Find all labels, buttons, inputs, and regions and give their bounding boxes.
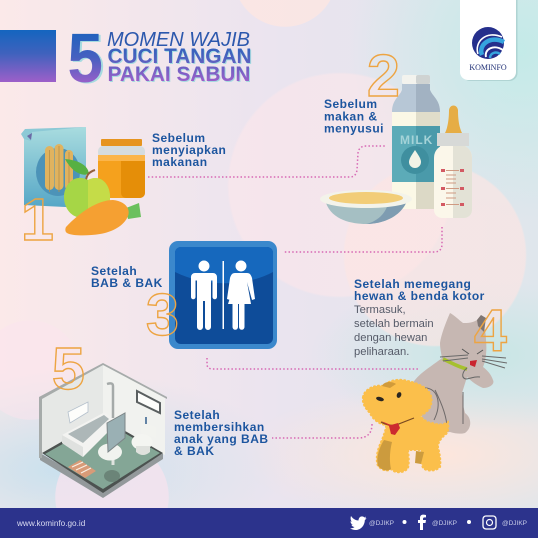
label 5: Setelah <box>174 408 220 422</box>
icon: twitter <box>350 516 366 530</box>
illustration 5: bathroom <box>39 363 167 498</box>
icon: sink mirror <box>107 413 125 452</box>
label 4: Termasuk, <box>354 304 406 316</box>
label 3: BAB & BAK <box>91 276 163 290</box>
icon: toilet <box>132 417 156 455</box>
divider <box>222 261 224 329</box>
icon: milk bottle: MILK <box>400 133 433 147</box>
icon: honey jar <box>98 139 145 198</box>
title: CUCI TANGAN <box>108 46 253 69</box>
icon: baby bottle <box>434 106 472 218</box>
illustration 1: food <box>21 127 145 235</box>
title: CUCI TANGAN <box>108 45 252 68</box>
logo card: KOMINFO <box>469 63 507 72</box>
label 1: Sebelum <box>152 131 206 145</box>
icon: carrot <box>65 200 141 235</box>
icon: instagram <box>483 516 496 529</box>
icon: milk bottle <box>392 75 440 209</box>
label 5: anak yang BAB <box>174 432 269 446</box>
icon: bowl <box>320 190 412 224</box>
base <box>40 453 163 498</box>
label 5: & BAK <box>174 444 214 458</box>
footer bar: @DJIKP <box>369 520 394 527</box>
number 1: 1 <box>21 187 54 253</box>
icon: dog <box>363 380 448 472</box>
icon: bathtub <box>62 412 112 457</box>
floor <box>42 418 163 493</box>
number 3: 3 <box>146 282 179 348</box>
dotted connectors <box>148 146 442 438</box>
title: 5 <box>70 20 105 99</box>
number 2: 2 <box>367 43 400 109</box>
title <box>68 19 253 99</box>
label 4: dengan hewan <box>354 332 427 344</box>
icon: towel <box>68 402 88 423</box>
icon: kominfo emblem <box>472 27 504 59</box>
label 4: setelah bermain <box>354 318 434 330</box>
icon: shower <box>107 383 113 418</box>
label 4 <box>354 277 485 358</box>
illustration 4: pets <box>363 313 507 472</box>
icon: cereal box <box>21 127 86 208</box>
number 4: 4 <box>474 298 507 364</box>
icon: bath mat <box>68 460 96 478</box>
icon: wall mirror <box>137 391 160 413</box>
icon: facebook <box>418 515 426 530</box>
label 4: Setelah memegang <box>354 277 471 291</box>
title: PAKAI SABUN <box>108 64 251 87</box>
walls <box>41 364 103 455</box>
footer bar: @DJIKP <box>502 520 527 527</box>
footer bar: @DJIKP <box>432 520 457 527</box>
label 5: membersihkan <box>174 420 265 434</box>
icon: apple stem <box>86 170 95 182</box>
label 2: makan & <box>324 110 378 124</box>
icon: man <box>191 260 217 330</box>
icon: sink <box>98 444 122 465</box>
icon: woman <box>227 260 255 330</box>
footer bar: www.kominfo.go.id <box>16 519 86 528</box>
icon: leaf <box>65 159 89 175</box>
label 1: menyiapkan <box>152 143 226 157</box>
header accent block <box>0 30 56 82</box>
label 4: peliharaan. <box>354 346 409 358</box>
label 2: Sebelum <box>324 97 378 111</box>
icon: floor drain <box>104 470 120 482</box>
label 3: Setelah <box>91 264 137 278</box>
label 2: menyusui <box>324 122 384 136</box>
icon: apple <box>64 178 110 218</box>
title: 5 <box>68 19 103 98</box>
icon: restroom sign <box>169 241 277 349</box>
number 5: 5 <box>52 336 85 402</box>
illustration 2: milk <box>320 75 472 224</box>
label 1: makanan <box>152 155 208 169</box>
title: MOMEN WAJIB <box>107 29 250 51</box>
icon: cat <box>412 313 507 434</box>
footer bar <box>0 508 538 538</box>
logo card <box>460 0 518 81</box>
label 4: hewan & benda kotor <box>354 289 485 303</box>
title: PAKAI SABUN <box>108 63 250 86</box>
